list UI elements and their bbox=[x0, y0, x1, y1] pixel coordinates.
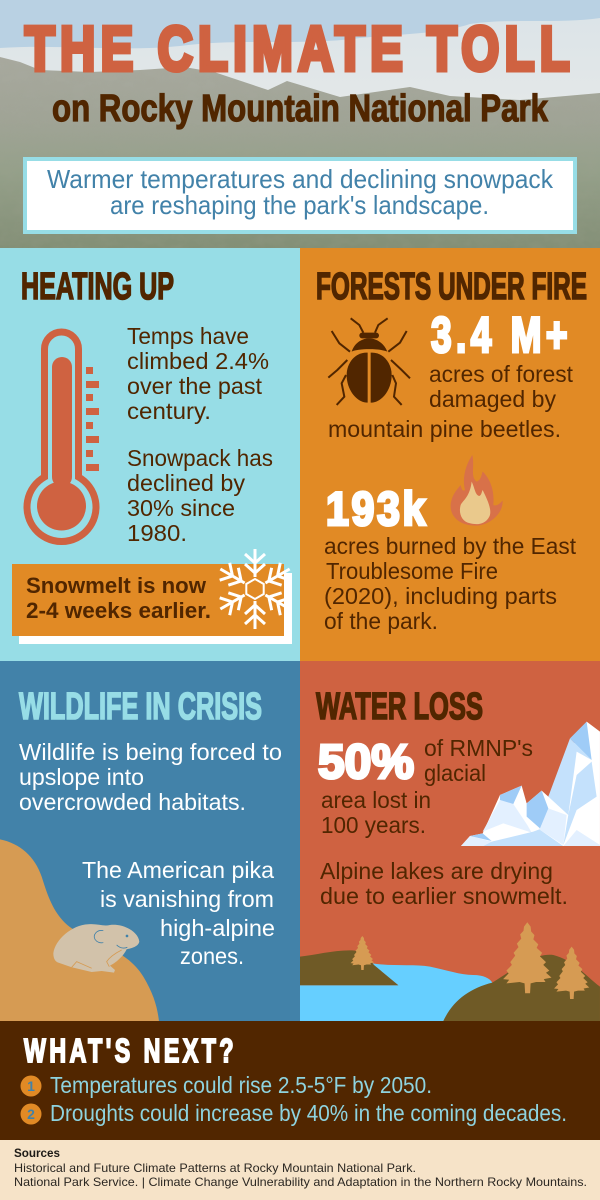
panel: wildlife in crisis bbox=[0, 661, 300, 1021]
illustration: lake and trees bbox=[300, 922, 600, 1021]
icon: beetle bbox=[328, 318, 410, 405]
text: alpine lakes: due to earlier snowmelt. bbox=[320, 883, 568, 909]
header photo background bbox=[0, 0, 600, 248]
text: temperature rise: over the past bbox=[127, 373, 262, 399]
text: alpine lakes: Alpine lakes are drying bbox=[320, 858, 553, 884]
intro callout box bbox=[25, 159, 575, 232]
text: upslope: Wildlife is being forced to bbox=[19, 739, 282, 765]
panel: heating up bbox=[0, 248, 300, 661]
panel: what's next bbox=[0, 1021, 600, 1140]
text: glacial loss: 100 years. bbox=[321, 812, 426, 838]
text: snowpack decline: declined by bbox=[127, 470, 245, 496]
callout: snowmelt: Snowmelt is now bbox=[26, 573, 207, 598]
text: upslope: upslope into bbox=[19, 764, 144, 790]
panel: sources bbox=[0, 1140, 600, 1200]
panel: sources: Sources bbox=[14, 1146, 60, 1160]
text: beetle damage: acres of forest bbox=[429, 361, 573, 387]
item 1: Temperatures could rise 2.5-5°F by 2050. bbox=[50, 1072, 432, 1098]
text: temperature rise bbox=[127, 323, 269, 424]
text: american pika: The American pika bbox=[82, 857, 275, 883]
text: temperature rise: century. bbox=[127, 398, 211, 424]
text: snowpack decline bbox=[127, 445, 273, 546]
heading: wildlife in crisis: WILDLIFE IN CRISIS bbox=[19, 686, 262, 728]
text: american pika: zones. bbox=[180, 943, 244, 969]
text: temperature rise: climbed 2.4% bbox=[127, 348, 269, 374]
icon: flame bbox=[451, 455, 503, 526]
intro callout box: Warmer temperatures and declining snowpack bbox=[47, 164, 554, 194]
text: snowpack decline: 30% since bbox=[127, 495, 235, 521]
panel: water loss bbox=[300, 661, 600, 1021]
tree large bbox=[503, 922, 552, 993]
hill bbox=[0, 839, 159, 1021]
text: american pika: is vanishing from bbox=[100, 886, 274, 912]
text: temperature rise: Temps have bbox=[127, 323, 249, 349]
text: alpine lakes bbox=[320, 858, 568, 909]
callout: snowmelt: 2-4 weeks earlier. bbox=[26, 598, 211, 623]
text: glacial loss: of RMNP's bbox=[424, 735, 533, 761]
text: glacial loss bbox=[321, 735, 533, 838]
panel: sources: Historical and Future Climate Patterns at Rocky Mountain National Park. bbox=[14, 1161, 416, 1175]
text: beetle damage: mountain pine beetles. bbox=[328, 416, 561, 442]
text: upslope: overcrowded habitats. bbox=[19, 789, 246, 815]
heading: heating up: HEATING UP bbox=[21, 266, 174, 308]
text: east troublesome fire: of the park. bbox=[324, 608, 438, 634]
text: beetle damage: damaged by bbox=[429, 386, 556, 412]
callout: snowmelt bbox=[12, 564, 292, 644]
intro callout box: are reshaping the park's landscape. bbox=[110, 190, 489, 220]
text: east troublesome fire: Troublesome Fire bbox=[326, 558, 498, 584]
panel: sources: National Park Service. | Climate Change Vulnerability and Adaptation in the Northern Rocky Mountains. bbox=[14, 1175, 587, 1189]
text: east troublesome fire: (2020), including parts bbox=[324, 583, 557, 609]
left hillside bbox=[300, 950, 398, 985]
tree medium bbox=[554, 947, 589, 999]
stat: 193k: 193k bbox=[326, 482, 428, 535]
tree small bbox=[351, 936, 374, 970]
text: glacial loss: area lost in bbox=[321, 787, 431, 813]
icon: thermometer bbox=[27, 332, 99, 542]
stat: 50%: 50% bbox=[318, 736, 414, 789]
item 2: 2 bbox=[27, 1106, 35, 1122]
text: beetle damage bbox=[328, 361, 573, 442]
text: east troublesome fire bbox=[324, 533, 576, 634]
text: american pika bbox=[82, 857, 275, 969]
icon: pika bbox=[53, 924, 139, 973]
text: snowpack decline: Snowpack has bbox=[127, 445, 273, 471]
panel: forests under fire bbox=[300, 248, 600, 661]
text: east troublesome fire: acres burned by the East bbox=[324, 533, 576, 559]
heading: water loss: WATER LOSS bbox=[316, 686, 483, 728]
text: american pika: high-alpine bbox=[160, 915, 275, 941]
text: snowpack decline: 1980. bbox=[127, 520, 187, 546]
text: glacial loss: glacial bbox=[424, 760, 486, 786]
icon: snowflake bbox=[215, 549, 295, 629]
heading: what's next: WHAT'S NEXT? bbox=[24, 1032, 237, 1069]
lake bbox=[300, 963, 492, 1021]
text: upslope bbox=[19, 739, 282, 815]
right hillside bbox=[443, 955, 600, 1021]
icon: iceberg bbox=[461, 722, 600, 846]
item 1: 1 bbox=[27, 1078, 35, 1094]
